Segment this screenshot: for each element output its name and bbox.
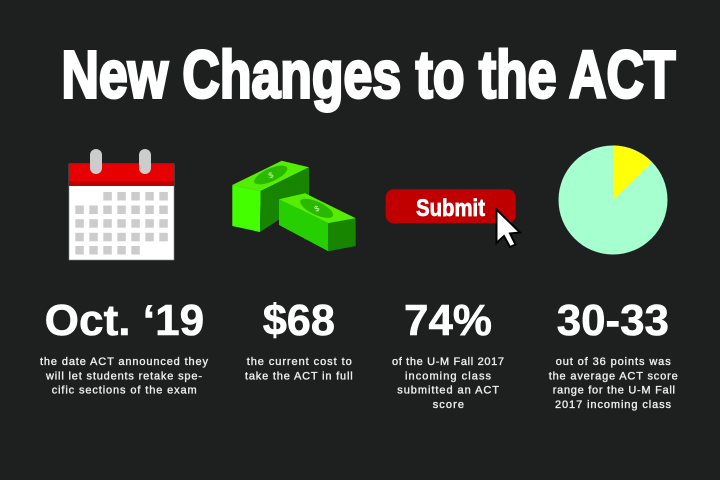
stat: 74%: 74% [404, 296, 492, 345]
description: 30-33: 2017 incoming class [555, 399, 672, 411]
description: 74%: incoming class [405, 370, 492, 382]
description: 74%: of the U-M Fall 2017 [392, 356, 504, 368]
description: Oct. 19: cific sections of the exam [52, 385, 197, 397]
stat: 74% [392, 296, 504, 411]
stat: Oct. 19 [40, 296, 208, 397]
icon: stacks of money [232, 161, 356, 251]
icon: stacks of money: $ [267, 170, 275, 180]
icon: stacks of money: $ [313, 204, 321, 214]
stat: 30-33: 30-33 [557, 296, 669, 345]
stat: $68 [245, 296, 353, 382]
description: Oct. 19: will let students retake spe- [45, 370, 202, 382]
description: 74% [392, 356, 504, 411]
description: 30-33: the average ACT score [549, 370, 678, 382]
description: $68: the current cost to [247, 356, 352, 368]
stat: 30-33 [549, 296, 678, 411]
description: 30-33: range for the U-M Fall [553, 385, 675, 397]
description: 30-33: out of 36 points was [556, 356, 671, 368]
description: 74%: score [433, 399, 464, 411]
description: 30-33 [549, 356, 678, 411]
icon: submit button with cursor: Submit [416, 195, 485, 222]
icon: submit button with cursor [386, 189, 520, 247]
description: $68 [245, 356, 353, 382]
icon: calendar [69, 149, 174, 260]
stat: Oct. 19: Oct. ‘19 [45, 296, 204, 345]
pie chart [558, 146, 668, 254]
description: $68: take the ACT in full [245, 370, 353, 382]
description: Oct. 19: the date ACT announced they [40, 356, 208, 368]
stat: $68: $68 [263, 296, 335, 345]
description: Oct. 19 [40, 356, 208, 397]
description: 74%: submitted an ACT [397, 385, 499, 397]
